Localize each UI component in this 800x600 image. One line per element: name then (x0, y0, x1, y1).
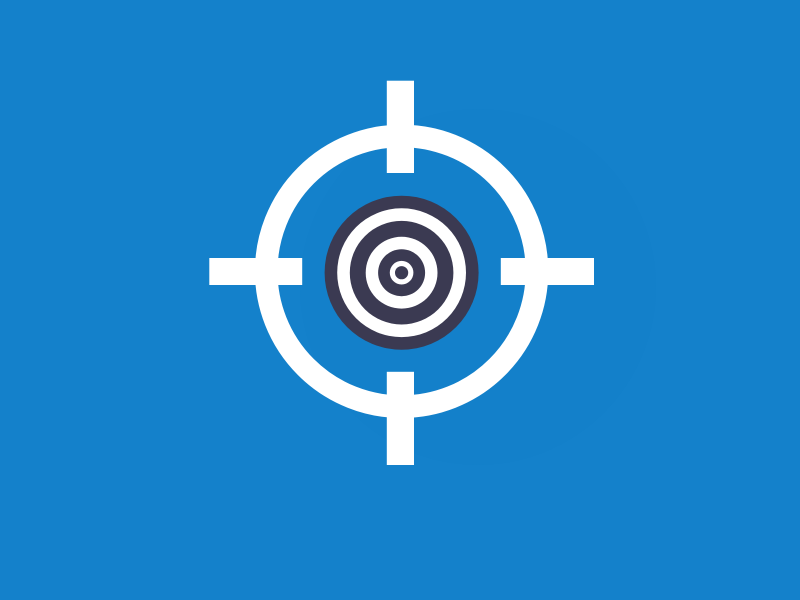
icon: bullseye target (325, 196, 479, 350)
faint background circle (300, 109, 656, 465)
crosshair tick: left (209, 258, 302, 285)
crosshair tick: right (501, 258, 594, 285)
crosshair tick: top (387, 81, 414, 173)
icon: crosshair ring (266, 136, 537, 407)
crosshair tick: bottom (387, 372, 414, 465)
